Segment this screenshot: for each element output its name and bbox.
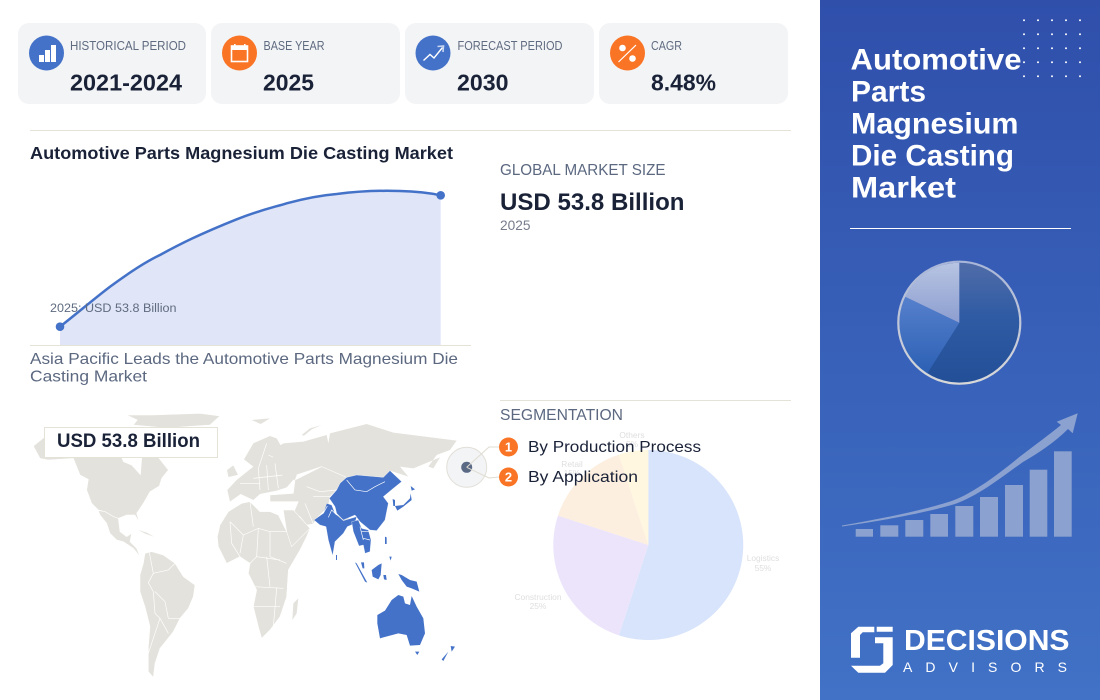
area chart: market growth (50, 191, 445, 345)
data point: start (56, 322, 64, 331)
world map (33, 413, 457, 677)
segment item 2: 2 (505, 470, 512, 484)
stat card: forecast period: 2030 (457, 70, 508, 96)
pie label: others: Others (619, 430, 645, 440)
segment item 1: By Production Process (528, 439, 701, 456)
pie label: construction: 25% (530, 601, 547, 611)
market size block: GLOBAL MARKET SIZE (500, 162, 666, 179)
segment item 2 (499, 468, 638, 486)
map callout circle (447, 447, 499, 487)
stat card: forecast period (405, 23, 594, 104)
icon: percent (610, 36, 645, 70)
sidebar title: Market (851, 172, 956, 204)
data point: end (436, 191, 445, 200)
logo tagline: ADVISORS (903, 659, 1067, 675)
stat card: base year: 2025 (263, 70, 314, 96)
logo wordmark: DECISIONS (904, 625, 1070, 657)
pie label: construction: Construction (514, 592, 562, 602)
region: Africa (217, 502, 310, 638)
region: Asia Pacific highlighted (314, 471, 455, 661)
segmentation heading: SEGMENTATION (500, 407, 623, 424)
pie label: retail: 15% (564, 468, 581, 478)
chart label: 2025: USD 53.8 Billion (50, 301, 177, 315)
segment item 2: By Application (528, 469, 638, 486)
stat card: base year (211, 23, 400, 104)
stat card: base year: BASE YEAR (264, 38, 324, 53)
stat card: forecast period: FORECAST PERIOD (458, 38, 562, 53)
sidebar title: Parts (851, 76, 926, 108)
pie label: retail: Retail (561, 459, 583, 469)
region: Russia and Central Asia (270, 424, 457, 547)
sidebar pie icon (898, 262, 1020, 384)
stat card: CAGR (599, 23, 788, 104)
icon: calendar (222, 36, 257, 70)
icon: bar chart (29, 36, 64, 70)
stat card: historical period (18, 23, 206, 104)
sidebar growth bars (856, 451, 1072, 537)
stat card: historical period: 2021-2024 (70, 70, 182, 96)
stat card: CAGR: 8.48% (651, 70, 716, 96)
heading: market chart: Automotive Parts Magnesium Die Casting Market (30, 143, 453, 163)
heading: regional: Asia Pacific Leads the Automotive Parts Magnesium Die (30, 351, 458, 368)
sidebar title: Automotive (850, 44, 1022, 76)
sidebar title: Magnesium (851, 108, 1018, 140)
pie label: logistics: Logistics (747, 553, 779, 563)
sidebar title: Die Casting (851, 140, 1014, 172)
pie chart: segmentation (514, 430, 779, 640)
panel: right sidebar (820, 0, 1100, 700)
segment item 1: 1 (505, 440, 512, 454)
market size block: 2025 (500, 218, 530, 233)
stat card: CAGR: CAGR (651, 38, 682, 53)
market size block: USD 53.8 Billion (500, 189, 684, 216)
region: Greenland (127, 413, 220, 428)
logo mark (851, 627, 893, 673)
map value label (44, 428, 218, 458)
pie label: others: 5% (626, 439, 639, 449)
logo: Decisions Advisors (851, 625, 1070, 675)
heading: regional: Casting Market (30, 368, 148, 386)
region: South America (140, 552, 195, 677)
region: North America (33, 427, 217, 557)
region: Europe (227, 418, 297, 502)
sidebar title (850, 44, 1022, 204)
sidebar growth arrow (842, 413, 1078, 526)
icon: trend arrow (416, 36, 450, 70)
stat card: historical period: HISTORICAL PERIOD (70, 38, 186, 53)
decorative dot grid (1023, 19, 1081, 77)
map value label: USD 53.8 Billion (57, 430, 200, 452)
market size block (500, 162, 684, 233)
pie label: logistics: 55% (755, 563, 772, 573)
